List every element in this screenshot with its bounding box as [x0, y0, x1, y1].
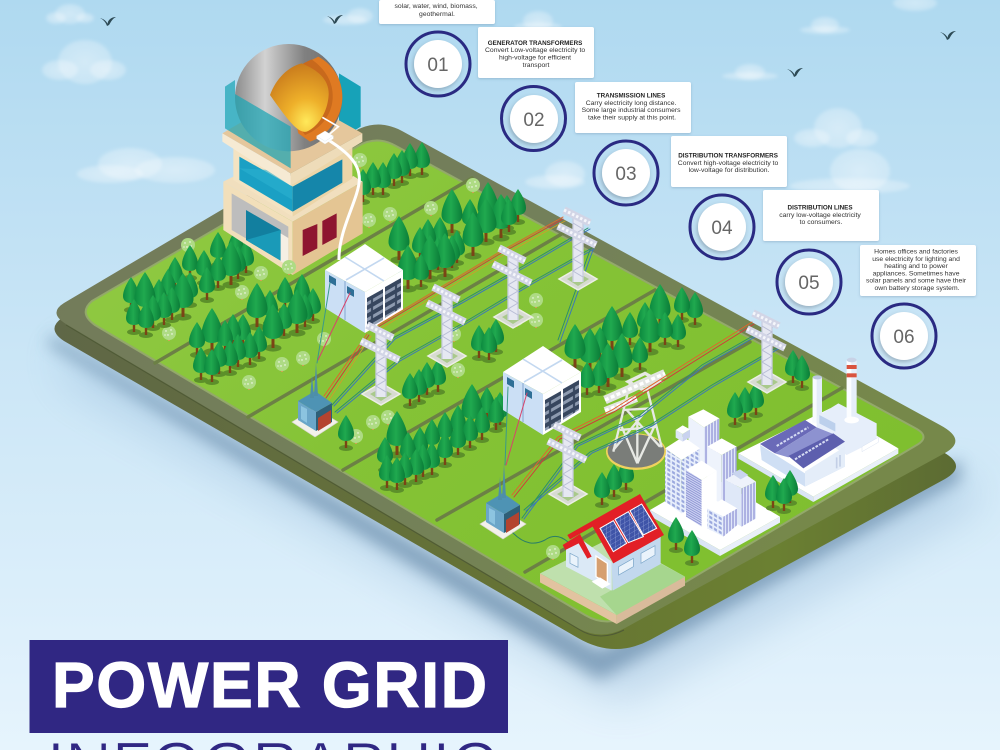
cable to house [513, 533, 568, 543]
card: distribution lines: to consumers. [800, 219, 842, 226]
card: generator transformers: high-voltage for efficient [499, 54, 571, 62]
tower mid right [707, 438, 737, 503]
field dividers [155, 178, 842, 572]
step badge 01: 01 [427, 55, 449, 76]
tree cluster: centre field [388, 182, 526, 293]
lower cables orange [512, 322, 754, 497]
birds [100, 15, 956, 77]
roof slab [222, 93, 362, 186]
card: transmission lines: take their supply at this point. [588, 114, 676, 122]
hall roofs [760, 420, 817, 453]
power plant building with geothermal sphere [222, 44, 363, 275]
card: distribution transformers [671, 136, 787, 187]
data center 2 [503, 346, 581, 435]
power cables [317, 217, 780, 543]
large transmission tower [605, 373, 666, 470]
bushes [162, 153, 560, 560]
platform upper surface [56, 124, 955, 634]
orange and red cables upper [378, 217, 565, 329]
card: consumers [860, 245, 976, 296]
transmission pylons [361, 210, 786, 505]
chimney small [813, 375, 822, 422]
card: consumers: solar panels and some have their [866, 278, 967, 284]
tree groups: small pairs [338, 319, 504, 451]
transformer 2 [480, 464, 526, 539]
lower cables green and blue [522, 325, 780, 519]
card: transmission lines: TRANSMISSION LINES [597, 92, 665, 100]
lower floor [223, 176, 363, 275]
tree cluster: second field [189, 274, 321, 385]
card: distribution lines: DISTRIBUTION LINES [788, 204, 853, 212]
tower back [688, 409, 719, 473]
platform edge line [66, 325, 624, 636]
card: generator transformers: transport [523, 62, 550, 69]
tree groups: behind factory [594, 350, 810, 508]
step badge 02: 02 [523, 110, 545, 131]
card: renewable sources [379, 0, 495, 24]
tower front low [707, 499, 737, 537]
card: distribution transformers: DISTRIBUTION TRANSFORMERS [678, 152, 778, 160]
tree cluster: right field [564, 284, 703, 398]
card: transmission lines: Carry electricity long distance. [586, 100, 676, 107]
transformer 1 [292, 362, 338, 437]
tower front stripes [686, 461, 717, 527]
transformer 2 to data center [505, 387, 527, 465]
step badge 01 [406, 32, 470, 96]
clouds [42, 0, 937, 194]
platform base [54, 124, 956, 649]
title [30, 640, 508, 750]
card: generator transformers [478, 27, 594, 78]
card: consumers: heating and to power [884, 263, 949, 270]
card: transmission lines [575, 82, 691, 133]
chimney red-striped [844, 358, 859, 423]
thin cable [322, 117, 338, 136]
tree groups: in front of pads [668, 470, 798, 566]
step badge 02 [502, 86, 566, 150]
card: distribution lines: carry low-voltage electricity [779, 212, 861, 219]
rear teal glass panel [339, 73, 361, 140]
cable connector [317, 131, 333, 144]
platform lower slab [54, 130, 956, 649]
card: consumers: use electricity for lighting and [872, 256, 960, 263]
card: generator transformers: Convert Low-voltage electricity to [485, 47, 585, 54]
green and blue cables upper [332, 228, 594, 413]
step badge 03: 03 [615, 164, 637, 185]
factory [738, 358, 898, 502]
card: consumers: Homes offices and factories [874, 248, 959, 256]
bush near building door [282, 260, 296, 275]
card: consumers: own battery storage system. [874, 285, 960, 292]
walls [566, 536, 661, 591]
solar panels [600, 504, 657, 552]
step badge 06: 06 [893, 327, 915, 348]
platform shadow [50, 335, 980, 700]
step badge 06 [872, 304, 936, 368]
title: POWER GRID [52, 649, 487, 721]
pad [540, 537, 685, 624]
windows [570, 546, 655, 575]
card: transmission lines: Some large industrial consumers [582, 107, 681, 114]
tower left tall [665, 425, 700, 513]
card: renewable sources: geothermal. [419, 11, 455, 18]
factory block [817, 403, 877, 455]
red roof [563, 494, 664, 563]
house on green pad [540, 494, 685, 624]
green field [86, 140, 923, 622]
hall walls [760, 445, 845, 487]
card: distribution lines [763, 190, 879, 241]
card: distribution transformers: Convert high-voltage electricity to [678, 160, 779, 167]
step badge 03 [594, 141, 658, 205]
cutaway sphere [235, 44, 342, 151]
step badge 05 [777, 250, 841, 314]
city pad and buildings [650, 409, 780, 556]
step badge 05: 05 [798, 273, 820, 294]
data center 1 [325, 244, 403, 333]
tree cluster: lower middle field [377, 384, 508, 493]
door [596, 556, 607, 583]
card: distribution transformers: low-voltage for distribution. [689, 167, 770, 174]
tree cluster: behind building [355, 142, 430, 205]
transformer 1 to data center [317, 250, 593, 400]
teal glass panel front [225, 80, 291, 168]
card: consumers: appliances. Sometimes have [873, 270, 960, 278]
card: generator transformers: GENERATOR TRANSFORMERS [488, 40, 582, 47]
step badge 04 [690, 195, 754, 259]
tree cluster: left field [123, 229, 254, 338]
white power cable [328, 140, 359, 260]
card: renewable sources: solar, water, wind, biomass, [394, 3, 478, 10]
tower right [725, 469, 756, 527]
step badge 04: 04 [711, 218, 733, 239]
upper floor [233, 143, 352, 217]
